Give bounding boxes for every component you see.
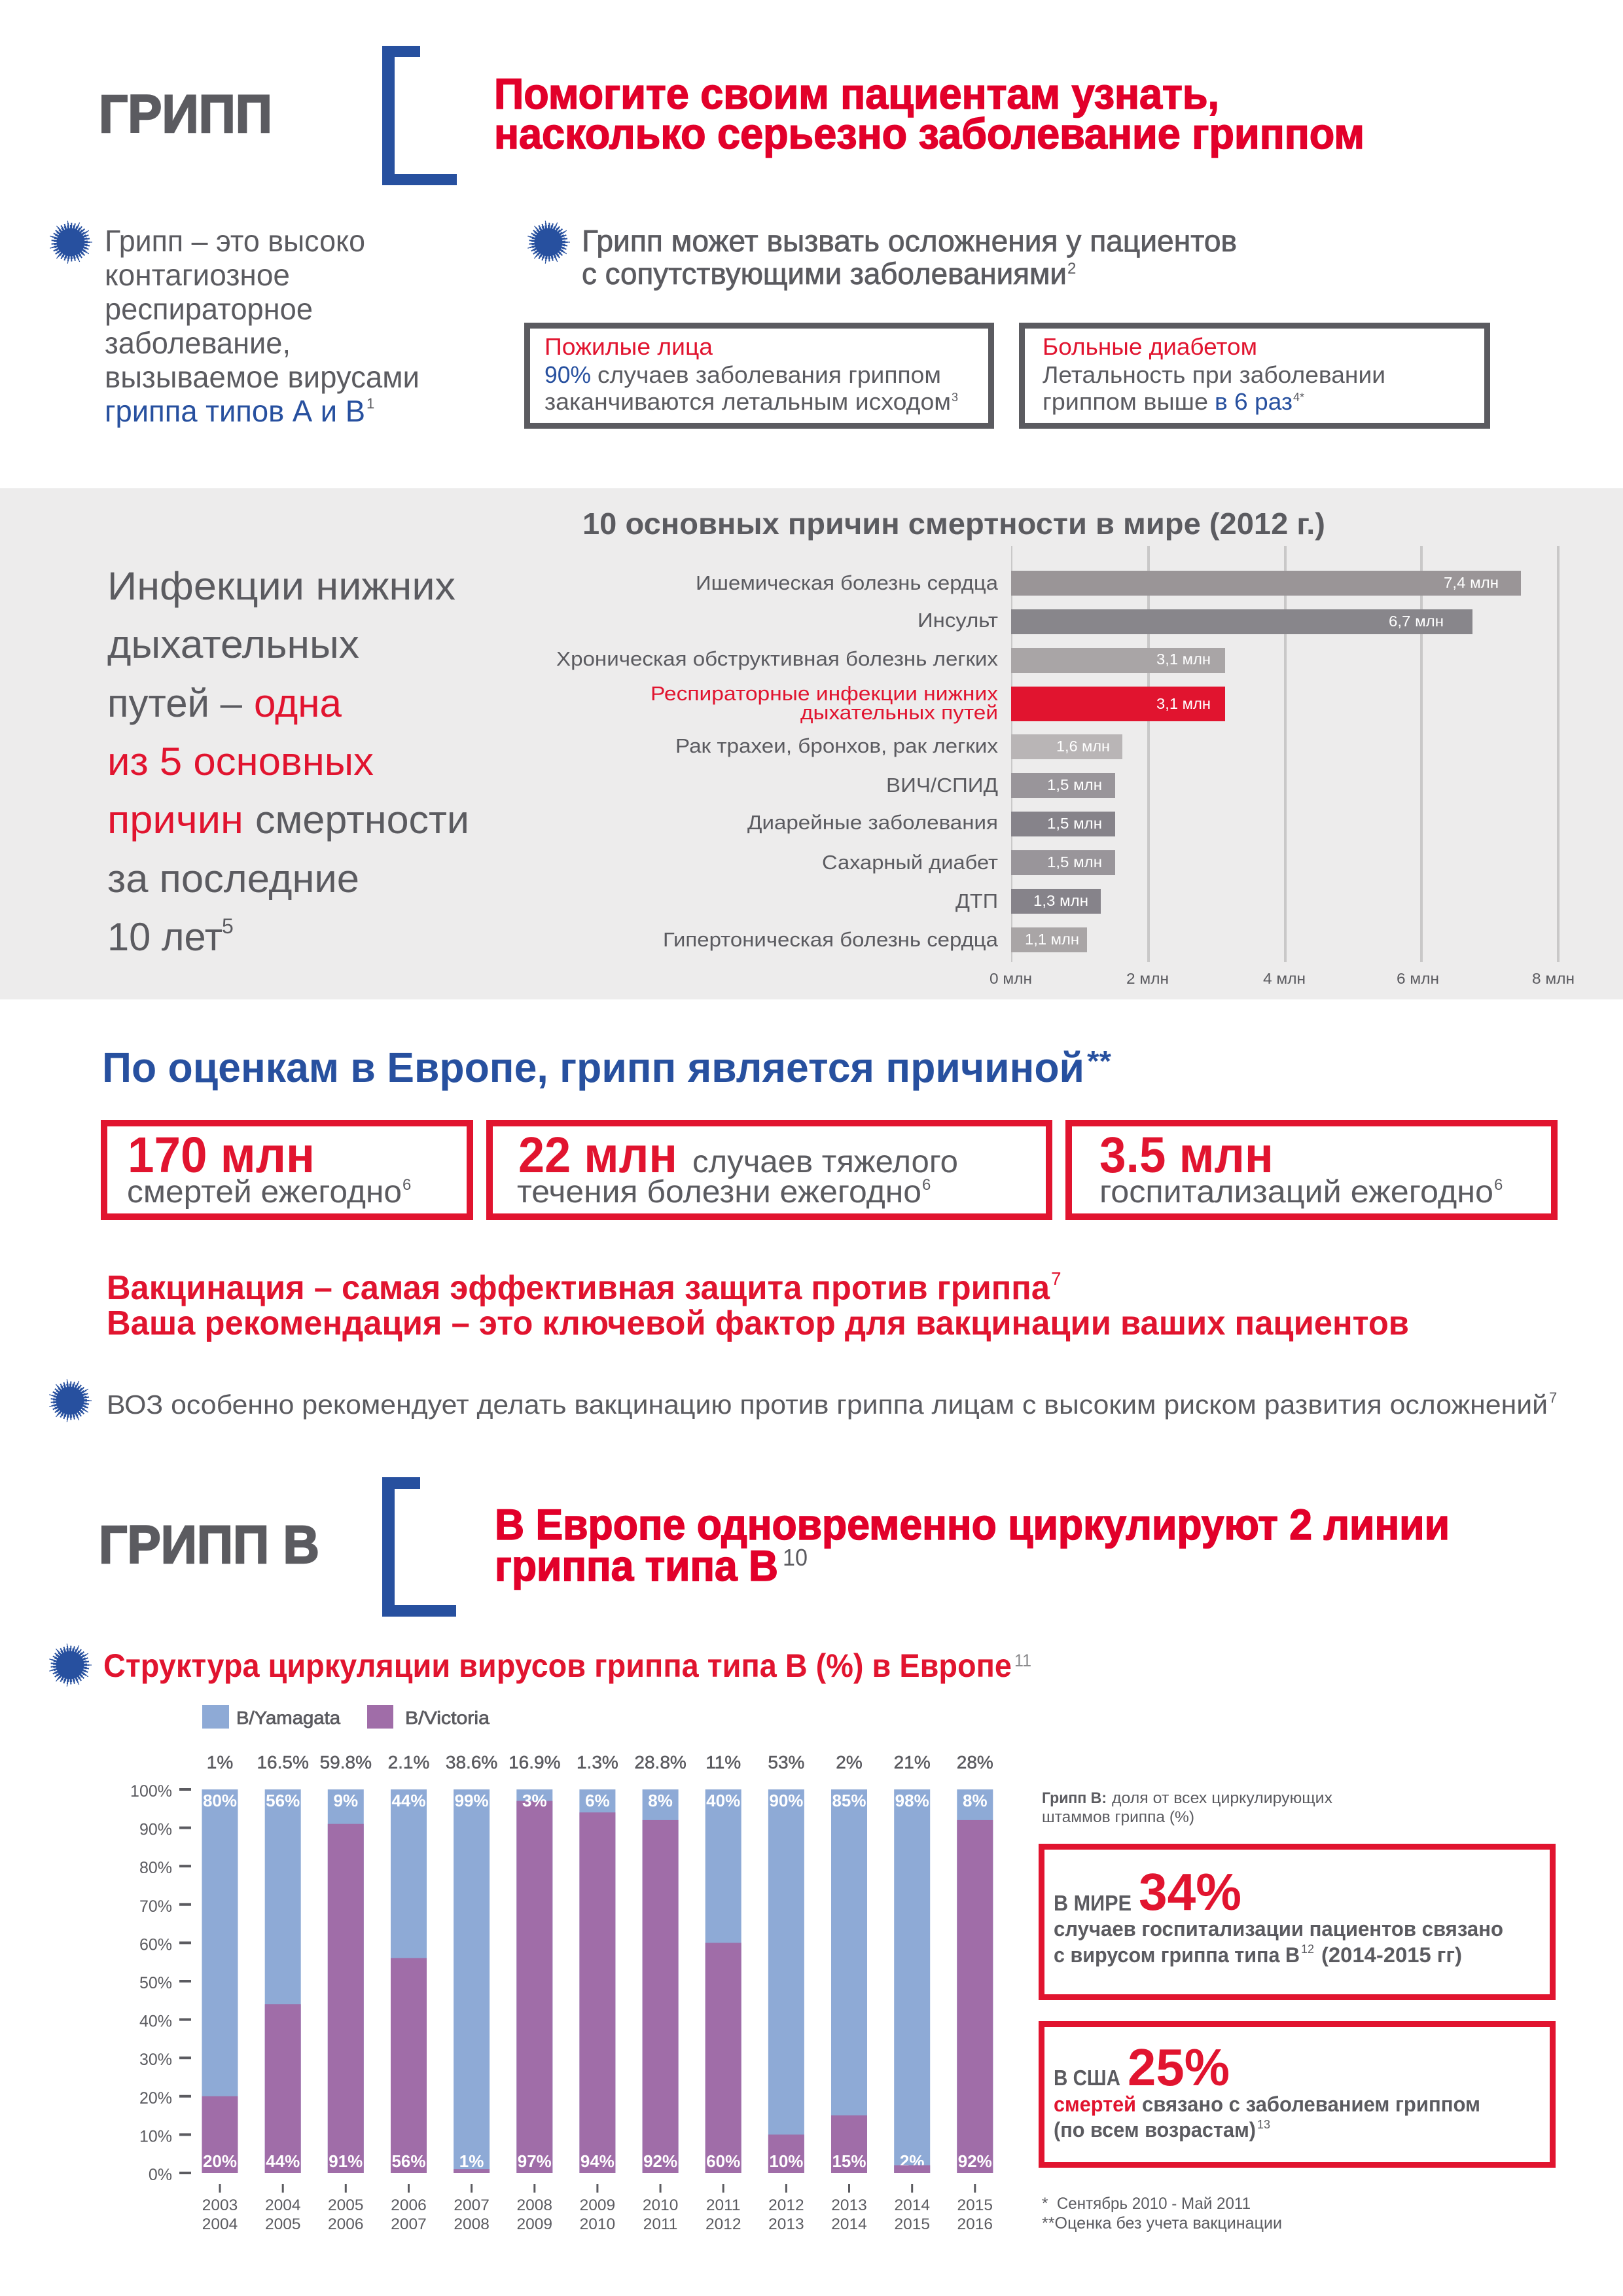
B share labels above bars: 28% [957, 1752, 993, 1772]
bar: lung cancer: Рак трахеи, бронхов, рак легких [675, 734, 999, 757]
legend: B/Victoria [405, 1708, 490, 1728]
axis labels: 2 млн [1126, 970, 1169, 987]
bar: HIV/AIDS [886, 773, 1115, 798]
footnotes [1042, 2195, 1282, 2233]
bar: 2003-2004 [202, 1789, 238, 2173]
bar: 2007-2008: 99% [455, 1791, 489, 1810]
bar: diarrhoeal diseases: Диарейные заболевания [747, 811, 998, 834]
callout: lower respiratory infections: путей – [107, 681, 243, 725]
panel: 3.5 million hospitalisations: 3.5 млн [1099, 1127, 1274, 1183]
title: ГРИПП: ГРИПП [99, 84, 272, 144]
definition paragraph [105, 224, 419, 428]
WHO text: 7 [1549, 1390, 1557, 1406]
bar: 2009-2010: 94% [580, 2151, 615, 2171]
headline: насколько серьезно заболевание гриппом [494, 109, 1364, 158]
y axis: 100% [130, 1782, 172, 1801]
bar: 2011-2012: 60% [706, 2151, 740, 2171]
bar: ischemic heart disease [696, 571, 1521, 596]
B share labels above bars: 16.9% [508, 1752, 561, 1772]
bar: 2014-2015: 98% [895, 1791, 929, 1810]
x axis: seasons: 2014 [831, 2215, 867, 2233]
x axis: seasons: 2006 [328, 2215, 364, 2233]
y axis: 50% [139, 1974, 172, 1992]
B share labels above bars: 1% [207, 1752, 233, 1772]
panel: elderly patients [527, 326, 991, 425]
x axis: seasons: 2008 [454, 2215, 490, 2233]
panel: USA 25%: 25% [1128, 2038, 1230, 2096]
x axis: seasons: 2007 [391, 2215, 427, 2233]
complications heading: 2 [1067, 260, 1076, 278]
panel: diabetic patients: гриппом выше [1043, 388, 1208, 415]
icon: blue bracket [382, 46, 457, 185]
footnotes: **Оценка без учета вакцинации [1042, 2214, 1282, 2233]
panel: 22 million severe cases: 22 млн [518, 1127, 677, 1183]
panel: worldwide 34%: 12 [1301, 1943, 1314, 1956]
axis labels: 4 млн [1263, 970, 1306, 987]
bar: 2012-2013: 10% [769, 2151, 803, 2171]
icon: virus burst [50, 1380, 90, 1421]
panel: 3.5 million hospitalisations: госпитализаций ежегодно [1099, 1175, 1493, 1210]
B share labels above bars: 1.3% [577, 1752, 618, 1772]
y axis: 90% [139, 1821, 172, 1839]
axis labels: 8 млн [1532, 970, 1575, 987]
panel: 22 million severe cases [490, 1123, 1049, 1217]
callout: lower respiratory infections: одна [254, 681, 342, 725]
panel: 170 million deaths: 6 [402, 1176, 411, 1194]
panel: 3.5 million hospitalisations [1069, 1123, 1554, 1217]
panel: USA 25%: 13 [1257, 2118, 1270, 2131]
axis labels: 0 млн [990, 970, 1032, 987]
bar: 2010-2011: 92% [643, 2151, 677, 2171]
footnotes: * Сентябрь 2010 - Май 2011 [1042, 2195, 1251, 2213]
section header: Грипп В [99, 1477, 1450, 1617]
y axis [130, 1782, 191, 2184]
heading: Europe estimates: По оценкам в Европе, грипп является причиной [102, 1044, 1084, 1091]
WHO text: ВОЗ особенно рекомендует делать вакцинацию против гриппа лицам с высоким риском развития осложнений [107, 1390, 1548, 1420]
text block: complications [528, 222, 1237, 291]
text block: flu definition [50, 222, 419, 428]
B share labels above bars: 2.1% [388, 1752, 429, 1772]
callout: vaccination message: Вакцинация – самая эффективная защита против гриппа [107, 1269, 1050, 1307]
panel: elderly patients: случаев заболевания гриппом [597, 361, 941, 388]
panel: diabetic patients: в 6 раз [1215, 388, 1293, 415]
panel: USA 25% [1042, 2024, 1552, 2165]
complications heading: Грипп может вызвать осложнения у пациентов [582, 224, 1237, 258]
x axis: seasons: 2007 [454, 2197, 490, 2214]
x axis: seasons: 2012 [768, 2197, 804, 2214]
bar: ischemic heart disease: 7,4 млн [1444, 574, 1499, 591]
legend [202, 1705, 490, 1729]
B share labels above bars: 59.8% [320, 1752, 372, 1772]
bar: 2010-2011 [643, 1789, 679, 2173]
panel: 170 million deaths: смертей ежегодно [127, 1175, 402, 1210]
bar: stroke: 6,7 млн [1389, 613, 1444, 630]
icon: blue bracket [382, 1477, 456, 1617]
panel: elderly patients: 90% [544, 361, 591, 388]
B share labels above bars: 21% [894, 1752, 931, 1772]
headline: 10 [783, 1544, 808, 1571]
x axis: seasons: 2003 [202, 2197, 238, 2214]
panel: elderly patients: 3 [952, 391, 958, 404]
bar: 2015-2016: 8% [963, 1791, 988, 1810]
bar: 2008-2009 [516, 1789, 552, 2173]
axis labels: 6 млн [1397, 970, 1439, 987]
definition paragraph: контагиозное [105, 258, 290, 292]
panel: USA 25%: связано с заболеванием гриппом [1142, 2092, 1480, 2116]
icon: virus burst [50, 1645, 90, 1685]
definition paragraph: 1 [366, 395, 374, 412]
x axis: seasons: 2015 [957, 2197, 993, 2214]
bar: 2013-2014 [831, 1789, 867, 2173]
bar: 2006-2007 [391, 1789, 427, 2173]
text block: WHO recommendation [50, 1380, 1557, 1421]
B share labels above bars [207, 1752, 993, 1772]
bar: stroke: Инсульт [918, 609, 998, 632]
bar: road accidents [955, 889, 1101, 914]
callout: lower respiratory infections: дыхательных [107, 622, 359, 666]
panel: diabetic patients: Больные диабетом [1043, 333, 1257, 360]
bar: 2014-2015 [894, 1789, 930, 2173]
bar: COPD: Хроническая обструктивная болезнь легких [556, 647, 999, 670]
bar: road accidents: 1,3 млн [1033, 892, 1088, 909]
y axis: 30% [139, 2051, 172, 2069]
definition paragraph: Грипп – это высоко [105, 224, 365, 258]
B share labels above bars: 28.8% [634, 1752, 687, 1772]
panel: worldwide 34%: случаев госпитализации пациентов связано [1054, 1917, 1503, 1941]
bar: diabetes: Сахарный диабет [822, 851, 998, 874]
bar: lower respiratory infections: дыхательных путей [800, 701, 998, 724]
callout: vaccination message: 7 [1051, 1268, 1061, 1289]
bar: road accidents: ДТП [955, 889, 998, 912]
bar: 2011-2012 [705, 1789, 741, 2173]
x axis: seasons: 2014 [894, 2197, 930, 2214]
bar: diarrhoeal diseases: 1,5 млн [1047, 815, 1102, 832]
callout: vaccination message: Ваша рекомендация – это ключевой фактор для вакцинации ваших пациентов [107, 1304, 1409, 1342]
callout: lower respiratory infections: 10 лет [107, 915, 223, 959]
bar: 2014-2015: 2% [900, 2151, 924, 2171]
definition paragraph: вызываемое вирусами [105, 360, 419, 394]
text block: flu B share note: доля от всех циркулирующих [1112, 1789, 1332, 1807]
x axis: seasons: 2008 [517, 2197, 552, 2214]
bar: 2009-2010 [579, 1789, 615, 2173]
callout: lower respiratory infections: смертности [255, 798, 469, 842]
bar: 2006-2007: 56% [391, 2151, 426, 2171]
panel: 170 million deaths: 170 млн [128, 1127, 315, 1183]
panel: elderly patients: Пожилые лица [544, 333, 713, 360]
panel: worldwide 34%: с вирусом гриппа типа В [1054, 1943, 1300, 1967]
bar: 2003-2004: 80% [203, 1791, 237, 1810]
callout: lower respiratory infections: причин [107, 798, 243, 842]
y axis: 60% [139, 1935, 172, 1954]
bar: 2007-2008 [454, 1789, 490, 2173]
panel: 22 million severe cases: 6 [922, 1176, 931, 1194]
bar: 2008-2009: 97% [518, 2151, 552, 2171]
bar: diabetes [822, 850, 1115, 875]
complications heading [582, 224, 1237, 291]
bar: 2008-2009: 3% [522, 1791, 547, 1810]
panel: diabetic patients: Летальность при заболевании [1043, 361, 1385, 388]
bar: HIV/AIDS: ВИЧ/СПИД [886, 774, 998, 797]
section header: Грипп [99, 46, 1364, 185]
bar: stroke [918, 609, 1472, 634]
bar: 2004-2005: 44% [266, 2151, 300, 2171]
heading: B strain structure [50, 1645, 1031, 1685]
x axis: seasons: 2005 [265, 2215, 300, 2233]
definition paragraph: заболевание, [105, 326, 291, 360]
callout: lower respiratory infections: Инфекции нижних [107, 564, 455, 608]
bar: 2004-2005: 56% [266, 1791, 300, 1810]
bar: lung cancer [675, 734, 1122, 759]
x axis: seasons: 2013 [768, 2215, 804, 2233]
B share labels above bars: 53% [768, 1752, 804, 1772]
bar: 2015-2016 [957, 1789, 993, 2173]
y axis: 10% [139, 2127, 172, 2145]
bar: 2004-2005 [265, 1789, 301, 2173]
callout: vaccination message [107, 1268, 1409, 1342]
panel: diabetic patients [1022, 326, 1487, 425]
x axis: seasons: 2015 [894, 2215, 930, 2233]
x axis: seasons: 2010 [580, 2215, 615, 2233]
heading text: Структура циркуляции вирусов гриппа типа В (%) в Европе [103, 1647, 1012, 1684]
x axis: seasons: 2004 [202, 2215, 238, 2233]
bar: 2015-2016: 92% [958, 2151, 992, 2171]
bar: hypertensive heart disease: Гипертоническая болезнь сердца [663, 928, 999, 951]
bar: 2013-2014: 15% [832, 2151, 866, 2171]
bar: 2005-2006: 9% [334, 1791, 358, 1810]
x axis: seasons [202, 2184, 993, 2233]
bar: COPD: 3,1 млн [1156, 651, 1211, 668]
bar: 2011-2012: 40% [706, 1791, 740, 1810]
bar: lung cancer: 1,6 млн [1056, 738, 1110, 755]
B share labels above bars: 2% [836, 1752, 863, 1772]
panel: 22 million severe cases: случаев тяжелого [692, 1145, 958, 1179]
x axis: seasons: 2009 [580, 2197, 615, 2214]
bar: 2005-2006: 91% [329, 2151, 363, 2171]
y axis: 70% [139, 1897, 172, 1916]
complications heading: с сопутствующими заболеваниями [582, 257, 1067, 291]
x axis: seasons: 2010 [643, 2197, 678, 2214]
panel: elderly patients: заканчиваются летальным исходом [544, 388, 951, 415]
bar: 2005-2006 [328, 1789, 364, 2173]
bar: hypertensive heart disease [663, 927, 1087, 952]
bar: 2013-2014: 85% [832, 1791, 866, 1810]
icon: virus burst [50, 222, 91, 262]
x axis: seasons: 2006 [391, 2197, 427, 2214]
title: ГРИПП В: ГРИПП В [99, 1515, 319, 1575]
panel: diabetic patients: 4* [1293, 391, 1304, 404]
stacked bar chart: B lineages by season [130, 1752, 993, 2233]
y axis: 40% [139, 2013, 172, 2031]
axis labels [990, 970, 1575, 987]
heading: Europe estimates: ** [1087, 1045, 1112, 1077]
bar: 2006-2007: 44% [391, 1791, 426, 1810]
x axis: seasons: 2013 [831, 2197, 867, 2214]
panel: 3.5 million hospitalisations: 6 [1494, 1176, 1503, 1194]
panel: USA 25%: смертей [1054, 2092, 1136, 2116]
headline [494, 69, 1364, 158]
text block: flu B share note: Грипп В: [1042, 1789, 1107, 1807]
bar: 2003-2004: 20% [203, 2151, 237, 2171]
panel: USA 25%: В США [1054, 2066, 1120, 2090]
bar: 2012-2013 [768, 1789, 804, 2173]
callout: lower respiratory infections: из 5 основных [107, 740, 374, 783]
bar: diarrhoeal diseases [747, 811, 1115, 836]
panel: worldwide 34%: В МИРЕ [1054, 1891, 1132, 1915]
bar: diabetes: 1,5 млн [1047, 853, 1102, 870]
bar: 2009-2010: 6% [585, 1791, 610, 1810]
x axis: seasons: 2012 [705, 2215, 741, 2233]
text block: flu B share note [1042, 1789, 1332, 1826]
headline [495, 1500, 1450, 1590]
callout: lower respiratory infections [107, 564, 469, 959]
panel: worldwide 34% [1042, 1847, 1552, 1998]
text block: flu B share note: штаммов гриппа (%) [1042, 1808, 1194, 1826]
bar: lower respiratory infections: Респираторные инфекции нижних [651, 682, 999, 705]
chart title: 10 основных причин смертности в мире (2012 г.) [582, 507, 1325, 541]
bar: hypertensive heart disease: 1,1 млн [1025, 931, 1079, 948]
panel: 170 million deaths [104, 1123, 470, 1217]
B share labels above bars: 38.6% [446, 1752, 497, 1772]
panel: leading causes of death [0, 488, 1623, 999]
x axis: seasons: 2011 [706, 2197, 741, 2214]
B share labels above bars: 11% [705, 1752, 741, 1772]
x axis: seasons: 2004 [265, 2197, 300, 2214]
panel: USA 25%: (по всем возрастам) [1054, 2118, 1256, 2142]
y axis: 80% [139, 1859, 172, 1877]
x axis: seasons: 2016 [957, 2215, 993, 2233]
headline: гриппа типа В [495, 1541, 778, 1590]
definition paragraph: респираторное [105, 292, 313, 326]
bar chart: causes of death [556, 546, 1575, 987]
callout: lower respiratory infections: за последние [107, 857, 359, 901]
bar: 2007-2008: 1% [459, 2151, 484, 2171]
bar: HIV/AIDS: 1,5 млн [1047, 776, 1102, 793]
panel: 22 million severe cases: течения болезни ежегодно [517, 1175, 921, 1210]
panel: worldwide 34%: 34% [1139, 1863, 1241, 1921]
definition paragraph: гриппа типов А и В [105, 394, 365, 428]
bar: 2012-2013: 90% [769, 1791, 803, 1810]
legend: B/Yamagata [236, 1708, 340, 1728]
bar: COPD [556, 647, 1225, 673]
headline: В Европе одновременно циркулируют 2 линии [495, 1500, 1450, 1549]
panel: worldwide 34%: (2014-2015 гг) [1321, 1943, 1462, 1967]
y axis: 20% [139, 2089, 172, 2108]
bar: lower respiratory infections [651, 682, 1225, 724]
footnote mark: 11 [1014, 1651, 1031, 1670]
B share labels above bars: 16.5% [257, 1752, 309, 1772]
x axis: seasons: 2011 [643, 2215, 677, 2233]
x axis: seasons: 2009 [517, 2215, 552, 2233]
icon: virus burst [528, 222, 569, 262]
headline: Помогите своим пациентам узнать, [494, 69, 1219, 118]
y axis: 0% [149, 2166, 172, 2184]
bar: 2010-2011: 8% [648, 1791, 673, 1810]
bar: ischemic heart disease: Ишемическая болезнь сердца [696, 571, 999, 594]
x axis: seasons: 2005 [328, 2197, 364, 2214]
bar: lower respiratory infections: 3,1 млн [1156, 695, 1211, 712]
callout: lower respiratory infections: 5 [222, 914, 234, 938]
